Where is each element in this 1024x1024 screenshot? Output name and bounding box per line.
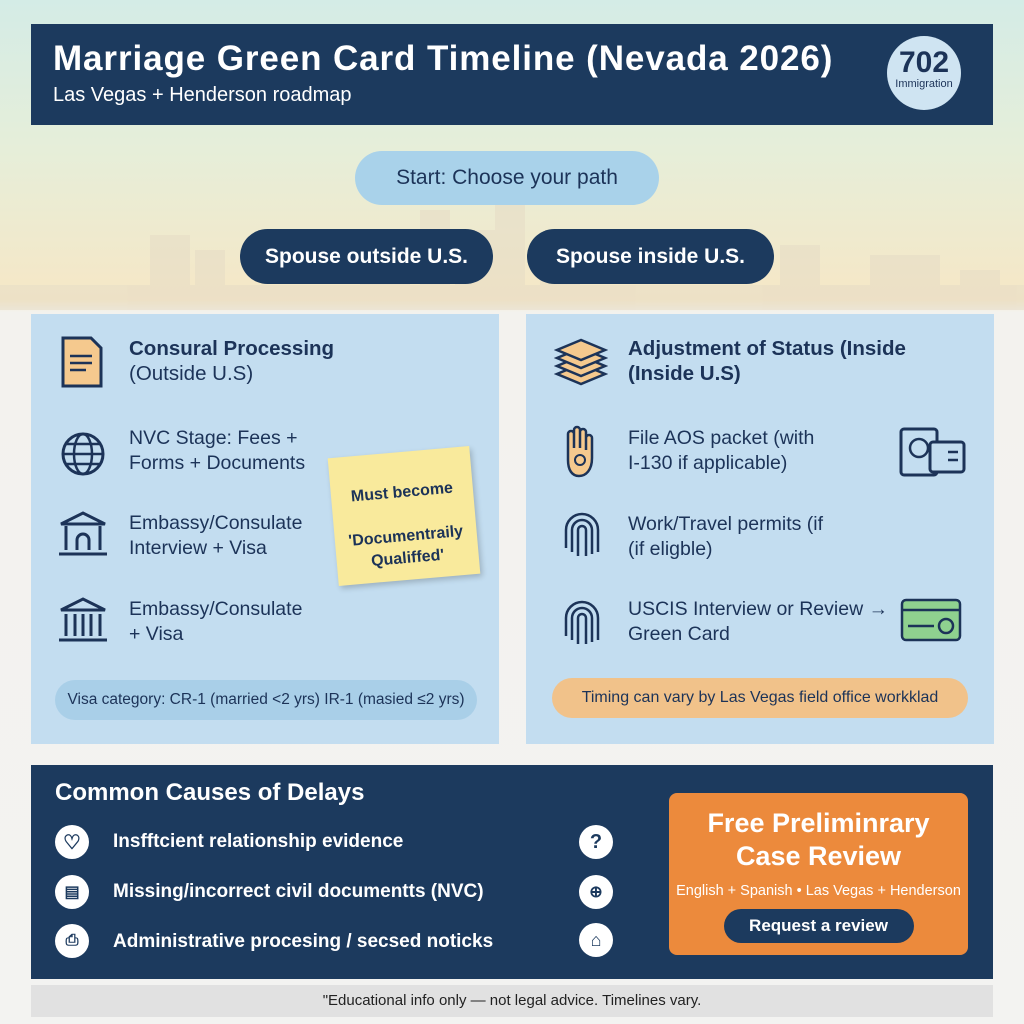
- panel: common causes of delays: Administrative procesing / secsed noticks: [113, 931, 493, 952]
- header bar: [31, 24, 993, 125]
- step: visa: + Visa: [129, 623, 183, 645]
- step: work/travel: [628, 513, 824, 560]
- button: [724, 909, 914, 943]
- logo badge: [887, 36, 961, 110]
- pill: spouse outside: [240, 229, 493, 284]
- icon: embassy 2: [59, 597, 107, 642]
- step: NVC: [129, 427, 305, 474]
- sticky note: Qualiffed': [371, 547, 445, 570]
- timing pill: Timing can vary by Las Vegas field office workklad: [582, 689, 938, 706]
- step: work/travel: Work/Travel permits (if: [628, 513, 823, 535]
- icon: stack: [554, 338, 608, 386]
- pill: spouse inside: Spouse inside U.S.: [556, 244, 745, 268]
- panel: common causes of delays: Insfftcient relationship evidence: [113, 831, 403, 852]
- callout: free review: English + Spanish • Las Vegas + Henderson: [676, 883, 961, 899]
- icon: embassy: [59, 511, 107, 556]
- callout: free review: Free Preliminrary: [707, 808, 930, 838]
- logo badge: 702: [899, 46, 949, 79]
- pill: spouse inside: [527, 229, 774, 284]
- step: visa: Embassy/Consulate: [129, 598, 302, 620]
- icon: hand: [566, 426, 594, 478]
- start pill: Start: Choose your path: [396, 166, 618, 189]
- heading: (Inside U.S): [628, 362, 741, 385]
- pill: spouse outside: Spouse outside U.S.: [265, 244, 468, 268]
- heading: [129, 337, 334, 385]
- step: interview: [628, 598, 888, 645]
- icon: green card: [900, 598, 962, 642]
- panel: consular processing: [31, 314, 499, 744]
- step: NVC: NVC Stage: Fees +: [129, 427, 298, 449]
- button: Request a review: [749, 916, 888, 935]
- step: interview: [129, 512, 302, 559]
- title: Marriage Green Card Timeline (Nevada 2026): [53, 39, 833, 78]
- start pill: [355, 151, 659, 205]
- step: interview: Green Card: [628, 623, 730, 645]
- heading: Common Causes of Delays: [55, 779, 364, 806]
- callout: free review: Case Review: [736, 841, 901, 871]
- step: visa: [129, 598, 302, 645]
- icon: globe: [62, 432, 104, 476]
- step: interview: Embassy/Consulate: [129, 512, 302, 534]
- delay 1: ♡: [63, 832, 81, 854]
- heading: Consural Processing: [129, 337, 334, 360]
- callout: free review: [669, 793, 968, 955]
- logo badge: Immigration: [895, 78, 953, 90]
- step: NVC: Forms + Documents: [129, 452, 305, 474]
- skyline background: [0, 205, 1024, 310]
- heading: (Outside U.S): [129, 362, 253, 385]
- delay 1: [55, 825, 89, 859]
- step: work/travel: (if eligble): [628, 538, 713, 560]
- delay 2: ▤: [64, 884, 80, 901]
- icon: document: [62, 336, 102, 388]
- panel: common causes of delays: ⊕: [589, 884, 603, 901]
- icon: fingerprint 2: [564, 600, 600, 644]
- delay 2: [55, 875, 89, 909]
- subtitle: Las Vegas + Henderson roadmap: [53, 84, 352, 106]
- side icons: [579, 825, 613, 859]
- timing pill: [552, 678, 968, 718]
- delay 3: ⎙: [66, 932, 78, 949]
- heading: Adjustment of Status (Inside: [628, 337, 906, 360]
- visa category pill: [55, 680, 477, 720]
- heading: [628, 337, 906, 385]
- step: file AOS: [628, 427, 814, 474]
- sticky note: Must become: [350, 480, 454, 506]
- side icons: ?: [590, 830, 602, 852]
- visa category pill: Visa category: CR-1 (married <2 yrs) IR-1 (masied ≤2 yrs): [67, 691, 465, 708]
- panel: adjustment of status: [526, 314, 994, 744]
- icon: passport: [900, 428, 966, 476]
- panel: common causes of delays: [31, 765, 993, 979]
- sticky note: 'Documentraily: [348, 523, 464, 550]
- panel: common causes of delays: ⌂: [591, 930, 601, 950]
- step: interview: USCIS Interview or Review →: [628, 598, 888, 620]
- footer disclaimer: [31, 985, 993, 1017]
- panel: common causes of delays: Missing/incorrect civil documentts (NVC): [113, 881, 484, 902]
- icon: fingerprint: [564, 512, 600, 556]
- sticky note: [328, 446, 480, 586]
- footer disclaimer: "Educational info only — not legal advice. Timelines vary.: [323, 992, 701, 1009]
- step: interview: Interview + Visa: [129, 537, 267, 559]
- step: file AOS: I-130 if applicable): [628, 452, 787, 474]
- delay 3: [55, 924, 89, 958]
- step: file AOS: File AOS packet (with: [628, 427, 814, 449]
